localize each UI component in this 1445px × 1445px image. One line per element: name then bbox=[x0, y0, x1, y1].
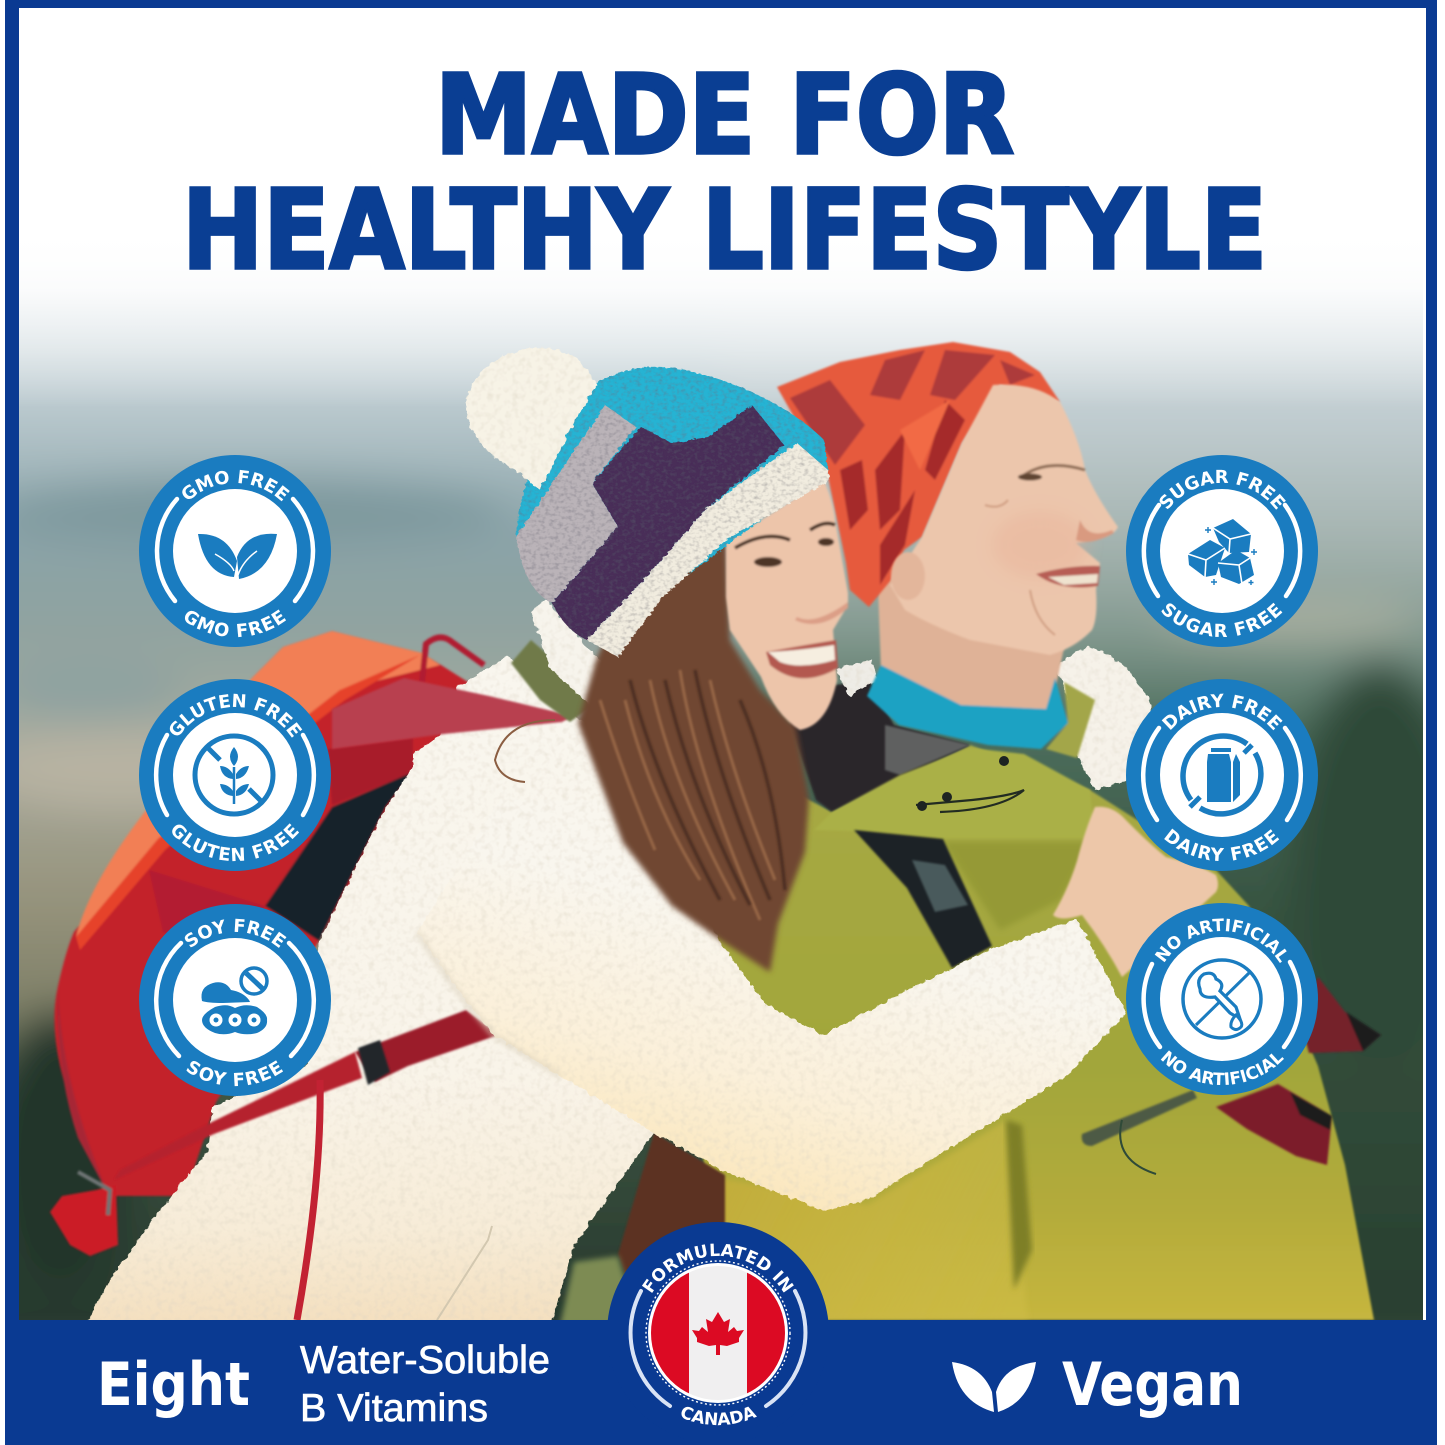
shoulder strap bbox=[332, 678, 573, 749]
text: eight water-soluble B vitamins: B Vitamins bbox=[300, 1387, 488, 1430]
badge: dairy free bbox=[1126, 679, 1318, 871]
white fleece: younger woman bbox=[85, 656, 1126, 1325]
green jacket: older woman bbox=[560, 680, 1374, 1325]
badge: sugar free: SUGAR FREE bbox=[1161, 602, 1282, 637]
badge: formulated in Canada bbox=[608, 1222, 828, 1426]
knit hat bbox=[516, 367, 830, 657]
icon: no dropper bbox=[1183, 960, 1261, 1038]
scarf bbox=[777, 342, 1060, 607]
text: vegan: Vegan bbox=[1062, 1350, 1243, 1420]
zipper pocket bbox=[437, 1226, 492, 1320]
bottom band bbox=[5, 1320, 1437, 1445]
shadow under hood bbox=[947, 842, 1081, 928]
badge: dairy free: DAIRY FREE bbox=[1164, 828, 1280, 861]
text: eight water-soluble B vitamins bbox=[97, 1339, 550, 1430]
backpack bbox=[50, 631, 578, 1256]
icon: no wheat bbox=[195, 736, 273, 814]
icon: no milk carton bbox=[1183, 736, 1261, 814]
badge: GMO free: GMO FREE bbox=[182, 470, 290, 502]
badge: GMO free: GMO FREE bbox=[184, 610, 286, 638]
gloves bbox=[1216, 977, 1381, 1165]
badge: gluten free bbox=[139, 679, 331, 871]
badge: no artificial bbox=[1126, 903, 1318, 1095]
badge: no artificial: NO ARTIFICIAL bbox=[1154, 918, 1287, 963]
badge: GMO free bbox=[139, 455, 331, 647]
drawstring bbox=[916, 790, 1024, 812]
jacket fold bbox=[1006, 1120, 1032, 1290]
badge: formulated in Canada: FORMULATED IN bbox=[642, 1244, 794, 1293]
younger woman's face bbox=[726, 480, 848, 730]
far shoulder fleece bbox=[1055, 647, 1153, 790]
misty mountain background bbox=[0, 260, 1445, 1360]
text: eight water-soluble B vitamins: Eight bbox=[97, 1350, 250, 1420]
pocket zipper bbox=[1082, 1090, 1197, 1146]
older woman's face bbox=[890, 385, 1118, 655]
badge: formulated in Canada: CANADA bbox=[682, 1406, 757, 1426]
icon: leaves bbox=[198, 534, 277, 579]
badge: gluten free: GLUTEN FREE bbox=[170, 694, 302, 738]
younger woman's collar bbox=[511, 600, 612, 722]
badge: dairy free: DAIRY FREE bbox=[1162, 694, 1282, 730]
icon: soybeans bbox=[201, 968, 267, 1034]
dark hood lining bbox=[790, 680, 970, 812]
title: HEALTHY LIFESTYLE bbox=[182, 166, 1267, 294]
small collar tuft bbox=[836, 660, 878, 696]
icon: vegan leaves bbox=[952, 1362, 1036, 1412]
arm fold shadow bbox=[417, 932, 560, 1076]
chest harness strap and buckle bbox=[355, 1010, 498, 1082]
title bbox=[182, 51, 1267, 294]
badge: sugar free: SUGAR FREE bbox=[1160, 470, 1286, 510]
lower left jacket highlight bbox=[720, 1120, 1028, 1320]
older woman's neck and collar bbox=[867, 560, 1095, 758]
photo: two women hugging on a mountain bbox=[19, 300, 1423, 1320]
badge: gluten free: GLUTEN FREE bbox=[172, 823, 299, 862]
badge: soy free: SOY FREE bbox=[186, 1060, 283, 1086]
pom-pom bbox=[465, 348, 596, 490]
gap between bodies bbox=[618, 1134, 727, 1274]
badge: soy free: SOY FREE bbox=[184, 918, 286, 948]
younger woman's hair bbox=[495, 530, 809, 972]
badge: no artificial: NO ARTIFICIAL bbox=[1160, 1050, 1284, 1085]
arm bbox=[420, 919, 1126, 1211]
backpack strap on jacket bbox=[854, 830, 992, 968]
Canadian flag bbox=[648, 1263, 788, 1403]
title: MADE FOR bbox=[435, 51, 1014, 179]
icon: sugar cubes bbox=[1188, 519, 1257, 585]
badge: soy free bbox=[139, 904, 331, 1096]
icon: maple leaf bbox=[692, 1312, 744, 1355]
white fade behind title bbox=[19, 245, 1423, 392]
hand on shoulder bbox=[1053, 807, 1218, 977]
badge: sugar free bbox=[1126, 455, 1318, 647]
hood bbox=[814, 748, 1095, 839]
text: eight water-soluble B vitamins: Water-Soluble bbox=[300, 1339, 550, 1382]
